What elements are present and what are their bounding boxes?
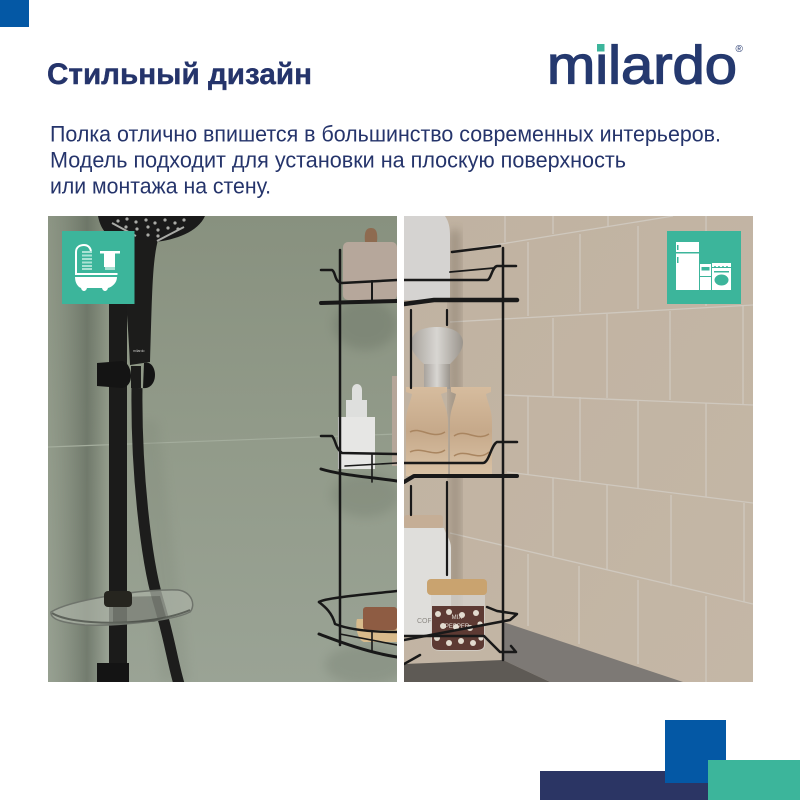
glass shelf bbox=[51, 590, 193, 625]
shower bracket bbox=[97, 361, 155, 388]
dropper bottle bbox=[338, 376, 397, 469]
countertop bbox=[404, 622, 683, 682]
brush bbox=[356, 607, 397, 642]
title: Стильный дизайн bbox=[47, 58, 312, 91]
icon: bathtub with shower and towel bbox=[62, 231, 134, 304]
pepper jar bbox=[427, 579, 487, 651]
description text: или монтажа на стену. bbox=[50, 174, 271, 198]
shower head and handle: milardo bbox=[133, 349, 145, 353]
wire shelf unit bbox=[404, 246, 517, 664]
panel: bathroom photo bbox=[48, 216, 405, 685]
logo: milardo: ® bbox=[736, 44, 744, 55]
logo: milardo: milardo bbox=[547, 36, 737, 96]
description text: Полка отлично впишется в большинство современных интерьеров. bbox=[50, 122, 721, 146]
rail bracket lower bbox=[97, 663, 129, 682]
shower rail bbox=[109, 304, 127, 663]
white canister bbox=[404, 515, 451, 635]
panel: kitchen photo bbox=[404, 216, 753, 682]
shower head and handle bbox=[98, 216, 205, 365]
glass carafe bbox=[411, 327, 463, 389]
white bottle bbox=[404, 216, 450, 300]
wire shelf unit bbox=[319, 250, 397, 657]
container on top shelf bbox=[343, 228, 397, 300]
white canister: COF bbox=[417, 618, 432, 625]
description text: Модель подходит для установки на плоскую поверхность bbox=[50, 148, 626, 172]
icon: kitchen appliances bbox=[667, 231, 741, 304]
description text bbox=[50, 122, 721, 198]
shower hose bbox=[137, 388, 179, 684]
decorative corner blocks bbox=[540, 720, 800, 800]
corner accent square bbox=[0, 0, 29, 27]
pepper jar: MIX bbox=[452, 615, 462, 621]
tile grout bbox=[450, 216, 753, 682]
pepper jar: PEPPER bbox=[445, 624, 470, 630]
back shadow bbox=[450, 230, 460, 640]
wooden jars bbox=[406, 387, 492, 476]
